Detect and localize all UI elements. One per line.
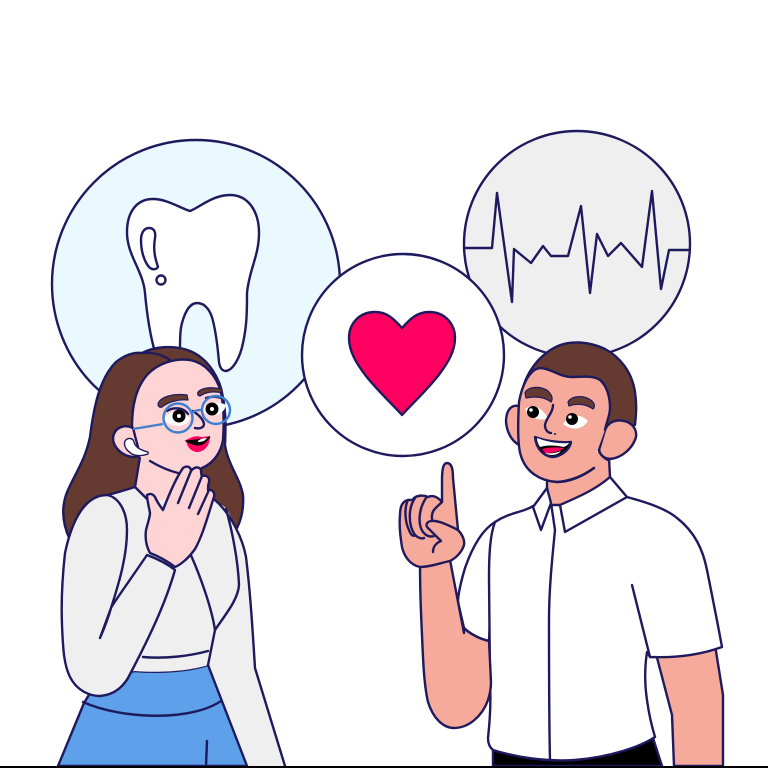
- eyebrows: [525, 387, 594, 409]
- bubble background: [464, 131, 690, 357]
- eyebrows: [158, 388, 222, 407]
- skirt: [58, 665, 247, 766]
- icon: tooth: [127, 195, 259, 371]
- icon: heart: [349, 312, 455, 415]
- cardigan and top: [95, 487, 285, 766]
- neck: [547, 455, 610, 505]
- finger lines: [178, 471, 209, 514]
- raised arm and hand: [400, 463, 491, 728]
- nostril: [554, 433, 556, 435]
- figure: woman: [58, 347, 285, 766]
- face: [518, 368, 610, 482]
- hand: [146, 467, 214, 567]
- face: [132, 360, 224, 474]
- near sleeve back: [458, 522, 495, 641]
- sleeve crease: [632, 585, 650, 657]
- left ear: [506, 406, 519, 445]
- teeth: [198, 438, 207, 442]
- jaw line: [557, 468, 594, 482]
- hair parting: [142, 353, 170, 360]
- sleeve: [62, 495, 175, 696]
- hair: [63, 347, 243, 540]
- bubble: heartbeat: [464, 131, 690, 357]
- collar: [533, 477, 627, 532]
- hair: [522, 342, 636, 432]
- bubble background: [302, 254, 504, 456]
- lips: [186, 436, 210, 452]
- neck: [135, 452, 200, 502]
- right ear: [599, 420, 636, 459]
- shirt placket: [549, 503, 555, 760]
- nose: [193, 411, 204, 428]
- bubble background: [52, 140, 340, 428]
- ground line: [0, 766, 768, 768]
- trousers: [493, 735, 662, 766]
- mouth: [186, 437, 210, 445]
- nose: [545, 405, 553, 433]
- skirt pleat: [206, 741, 207, 766]
- earbud: [124, 438, 148, 456]
- top waistband: [143, 651, 208, 658]
- far arm: [655, 645, 723, 766]
- eyes: [164, 397, 226, 426]
- icon: heartbeat waveform: [464, 191, 689, 302]
- mouth: [535, 437, 571, 457]
- eyes: [525, 406, 588, 429]
- bubble: tooth: [52, 140, 340, 428]
- shirt: [488, 490, 722, 760]
- jaw line: [150, 461, 178, 473]
- ear: [113, 426, 140, 457]
- skirt waist fold: [83, 698, 225, 716]
- figure: man: [400, 342, 723, 766]
- cardigan front edges: [190, 509, 239, 630]
- glasses: [133, 396, 230, 432]
- bubble: heart: [302, 254, 504, 456]
